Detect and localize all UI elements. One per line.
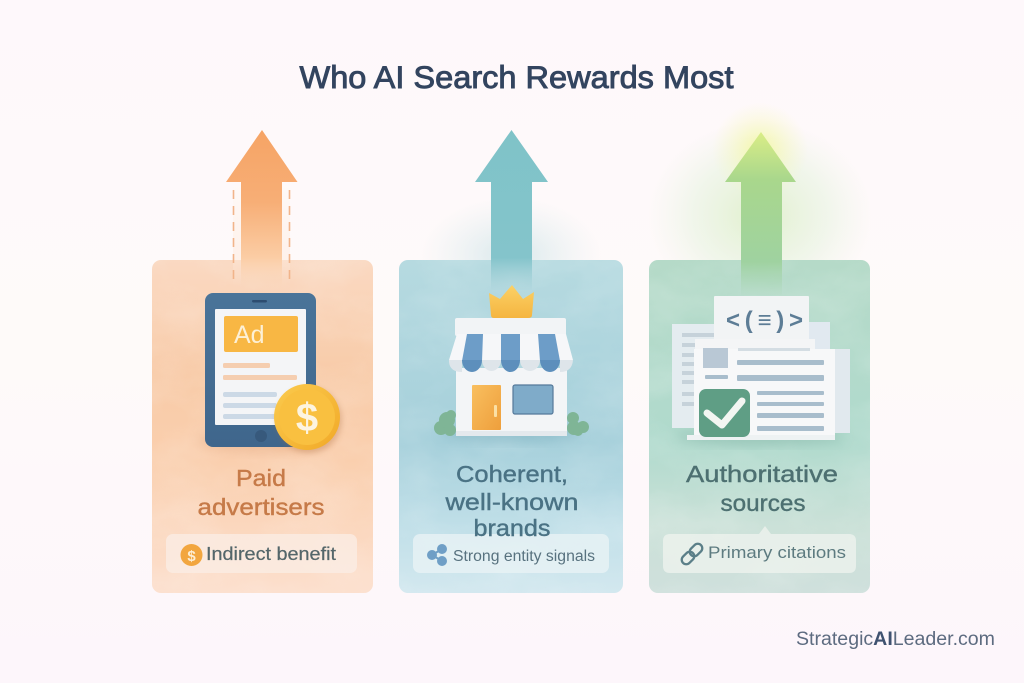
heading: paid advertisers: Paid (236, 465, 286, 491)
badge: primary citations: Primary citations (708, 543, 846, 562)
window (513, 385, 553, 414)
green glow behind arrow (648, 120, 872, 310)
heading: well-known brands: brands (474, 515, 550, 541)
panel background: green (649, 260, 870, 593)
code card (714, 296, 809, 346)
footer brand: StrategicAILeader.com (796, 629, 995, 650)
title: Who AI Search Rewards Most (300, 59, 734, 95)
panel: paid advertisers (152, 130, 373, 593)
badge: indirect benefit: $ (187, 548, 196, 565)
ad banner: Ad (234, 321, 265, 349)
panel background: orange (152, 260, 373, 593)
badge: strong entity signals (413, 534, 609, 573)
icon: tablet with ad (198, 293, 342, 453)
ad banner (224, 316, 298, 352)
heading: authoritative sources: sources (720, 490, 806, 516)
icon: storefront (434, 318, 589, 442)
arrow: teal up arrow (475, 130, 548, 290)
heading: well-known brands: Coherent, (456, 461, 568, 487)
icon: green check badge (699, 389, 750, 437)
soft blue haze behind arrow (421, 197, 601, 313)
bushes (434, 410, 589, 436)
code card: <(≡)> (726, 307, 803, 334)
arrow: green up arrow (725, 132, 796, 295)
yellow glow at arrow tip (712, 102, 808, 198)
icon: crown (489, 285, 534, 318)
icon: documents with check (672, 296, 850, 445)
door (472, 385, 501, 430)
badge: strong entity signals: Strong entity signals (453, 548, 595, 565)
icon: dollar coin: $ (296, 396, 318, 440)
badge: primary citations (663, 526, 856, 573)
heading: well-known brands: well-known (444, 489, 578, 515)
arrow: orange up arrow (226, 130, 298, 290)
badge: indirect benefit (166, 534, 357, 573)
panel: authoritative sources (648, 102, 872, 593)
panel: well-known brands (399, 130, 623, 593)
heading: paid advertisers: advertisers (198, 494, 324, 520)
heading: authoritative sources: Authoritative (686, 461, 838, 487)
badge: indirect benefit: Indirect benefit (206, 544, 336, 564)
awning (449, 334, 573, 372)
panel background: blue (399, 260, 623, 593)
icon: dollar coin (274, 384, 342, 453)
